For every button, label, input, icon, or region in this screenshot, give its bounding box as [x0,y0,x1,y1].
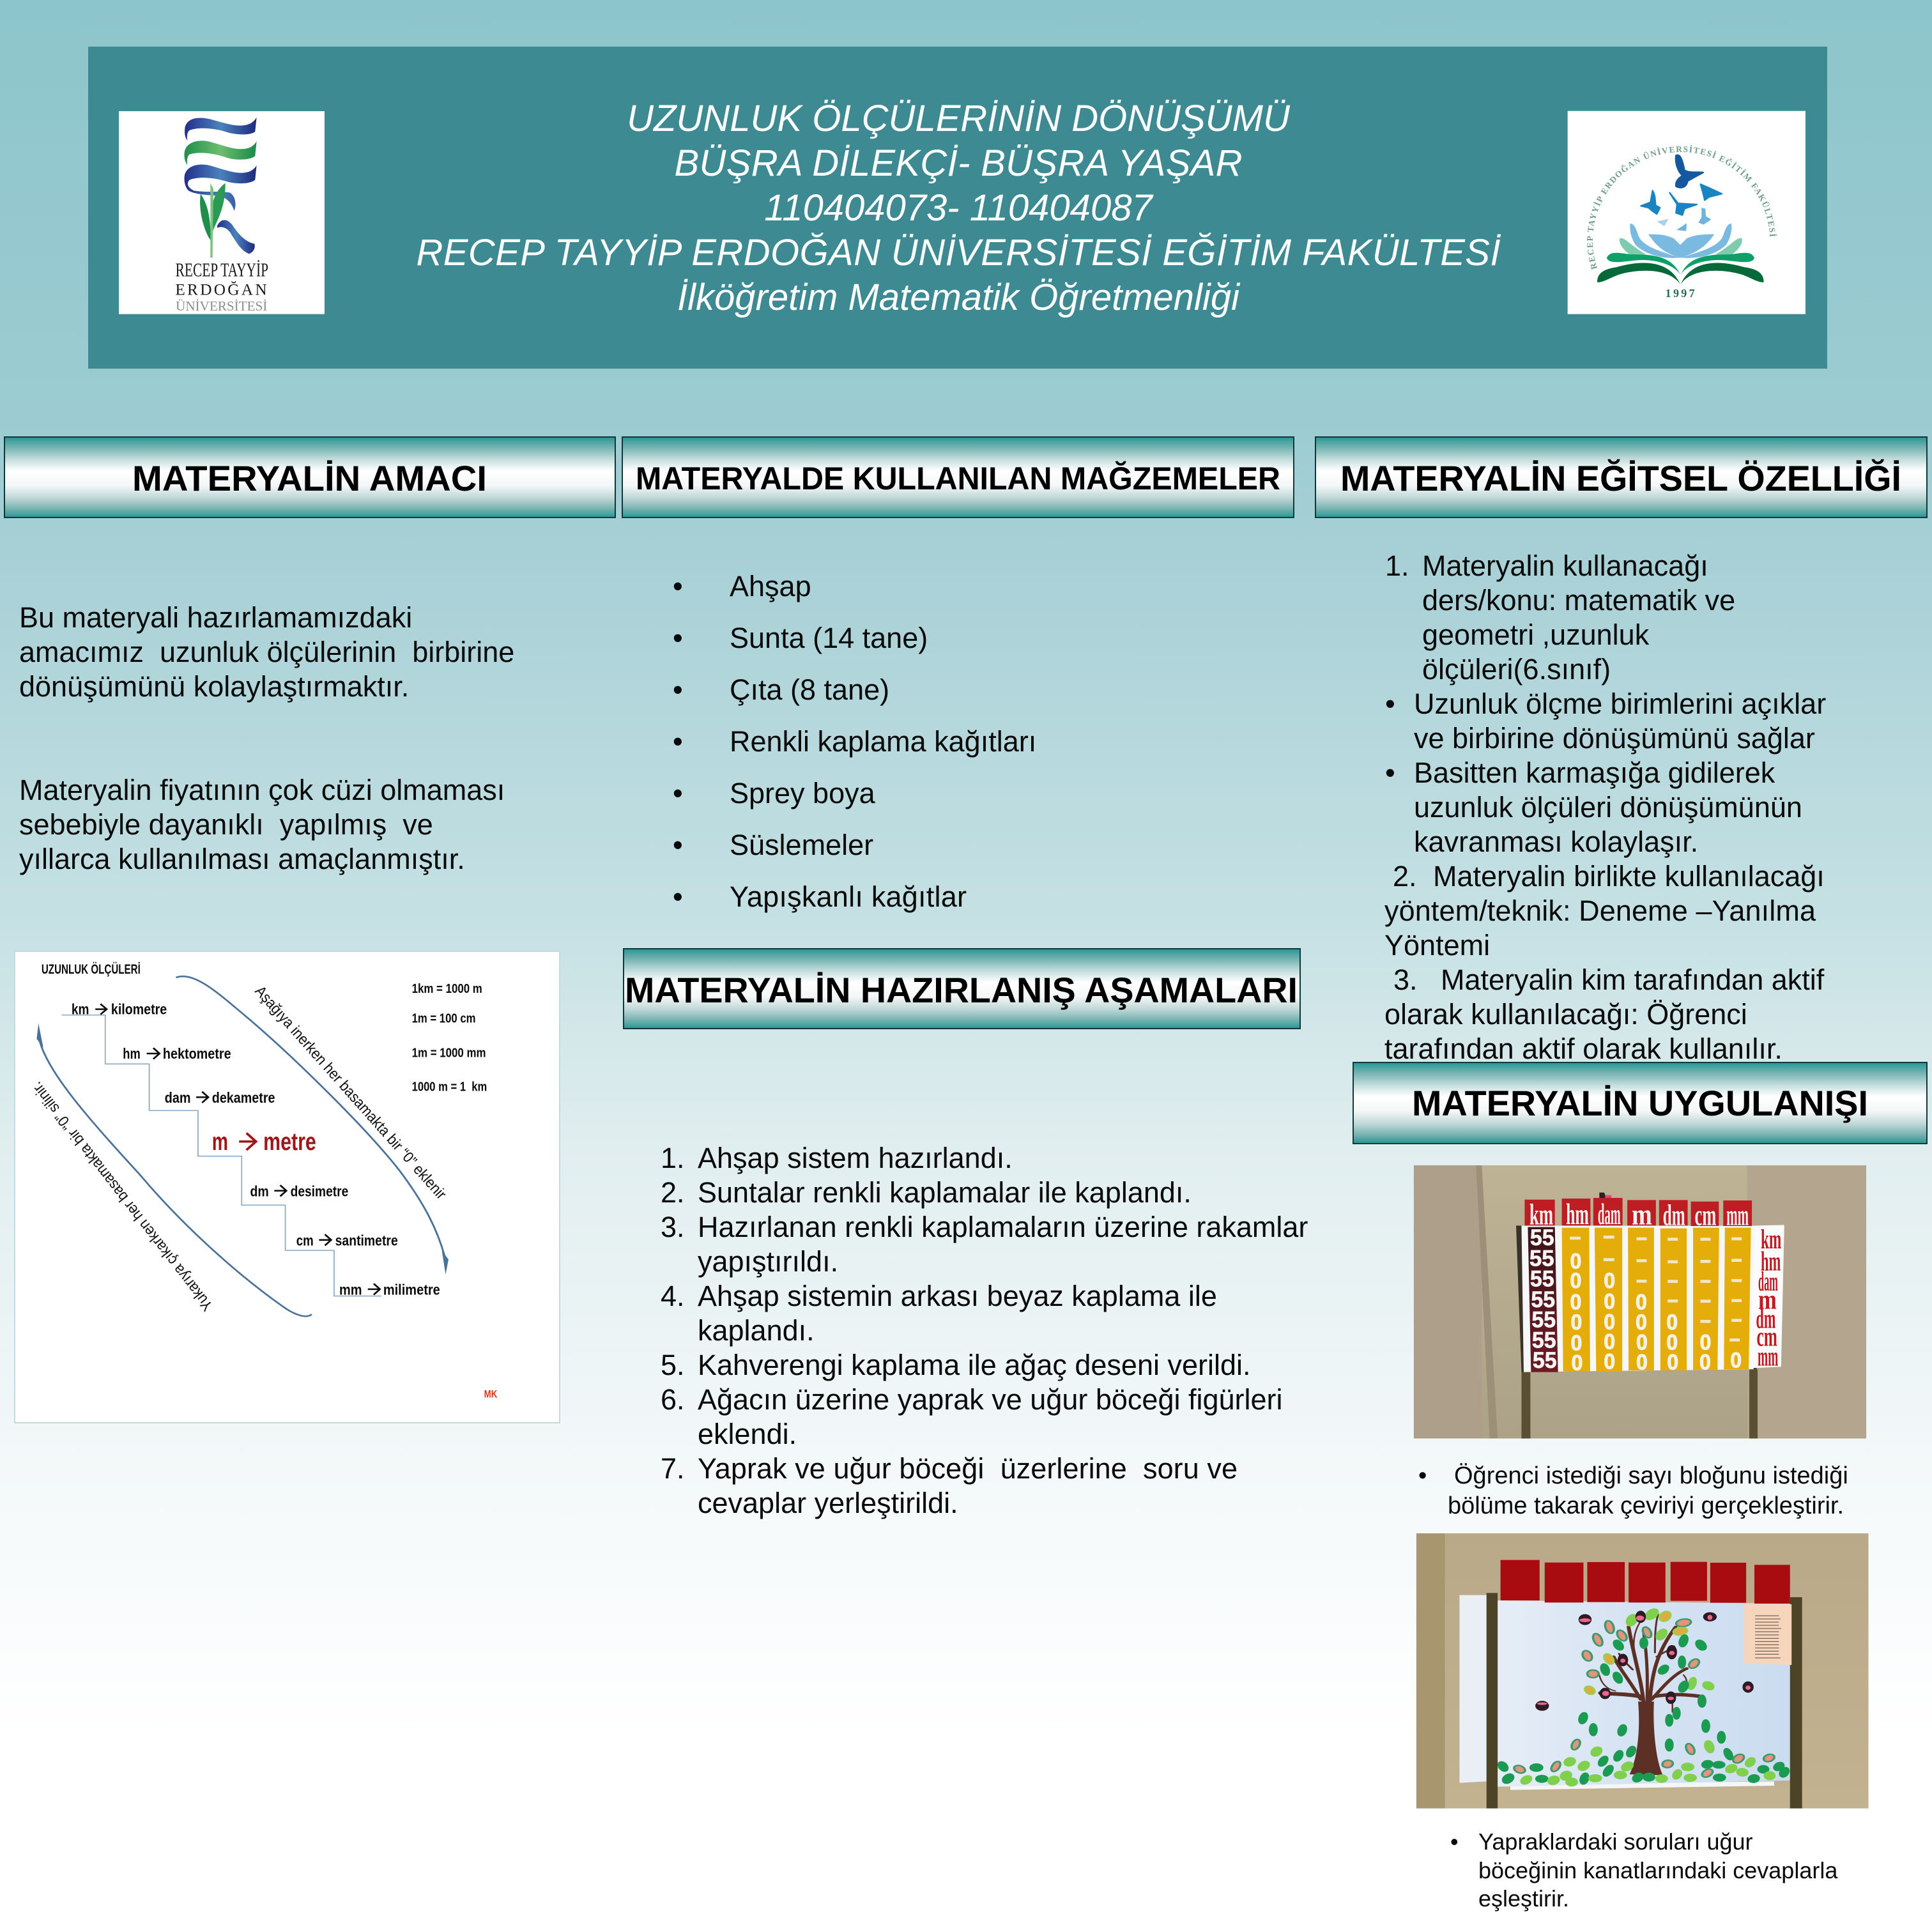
list: malzemeler: • [673,777,683,809]
photo: sayı blokları tahtası: 0 [1572,1351,1583,1375]
list: aşamalar: 2. [661,1176,685,1209]
list: aşamalar: 6. [661,1383,685,1416]
photo: sayı blokları tahtası: 55 [1531,1307,1556,1333]
list: aşamalar: 5. [661,1349,685,1381]
photo: sayı blokları tahtası [1414,1165,1866,1439]
photo: sayı blokları tahtası: dm [1663,1199,1685,1232]
diagram: uzunluk ölçüleri merdiveni: 1m = 100 cm [412,1011,475,1025]
heading: uygulanış: MATERYALİN UYGULANIŞI [1412,1083,1868,1123]
photo: sayı blokları tahtası: 0 [1604,1330,1615,1354]
photo: sayı blokları tahtası: 0 [1699,1330,1711,1354]
diagram: uzunluk ölçüleri merdiveni: 1000 m = 1 km [412,1079,487,1094]
photo: sayı blokları tahtası: 0 [1636,1351,1648,1375]
text block: eğitsel özellikler: 1. [1385,549,1409,582]
diagram: uzunluk ölçüleri merdiveni: cm [296,1233,314,1249]
panel: materyalin uygulanışı [1353,1062,1927,1912]
photo: sayı blokları tahtası: cm [1757,1321,1777,1352]
list: aşamalar: cevaplar yerleştirildi. [698,1487,958,1519]
diagram: uzunluk ölçüleri merdiveni: 1km = 1000 m [412,981,482,996]
text block: eğitsel özellikler [1384,549,1826,1065]
photo: sayı blokları tahtası: 0 [1636,1290,1647,1314]
text block: eğitsel özellikler: ölçüleri(6.sınıf) [1422,653,1611,686]
photo: sayı blokları tahtası: dm [1756,1303,1775,1334]
caption: yapraklar ve uğur böceği: • [1450,1828,1459,1855]
photo: sayı blokları tahtası: hm [1566,1197,1589,1230]
diagram: uzunluk ölçüleri merdiveni: Yukarıya çıkarken her basamakta bir “0” silinir. [28,1078,217,1314]
title text [417,98,1501,318]
panel: materyalde kullanılan malzemeler [622,437,1294,913]
text block: amaç paragrafları: sebebiyle dayanıklı yapılmış ve [19,808,433,841]
photo: sayı blokları tahtası: hm [1761,1246,1781,1276]
photo: sayı blokları tahtası: mm [1758,1341,1778,1372]
panel: hazırlanış aşamaları [624,949,1308,1519]
logo: Eğitim Fakültesi: 1997 [1666,287,1697,300]
caption: yapraklar ve uğur böceği [1450,1828,1838,1912]
photo: sayı blokları tahtası: 0 [1604,1289,1615,1314]
caption: öğrenci sayı bloğu: Öğrenci istediği sayı bloğunu istediği [1454,1462,1848,1489]
photo: sayı blokları tahtası: 0 [1730,1349,1742,1373]
list: malzemeler: Sunta (14 tane) [730,622,928,654]
text block: eğitsel özellikler: kavranması kolaylaşır. [1414,825,1698,858]
photo: sayı blokları tahtası: 0 [1604,1350,1615,1374]
diagram: uzunluk ölçüleri merdiveni: kilometre [111,1002,167,1018]
text block: eğitsel özellikler: geometri ,uzunluk [1422,618,1650,651]
diagram: uzunluk ölçüleri merdiveni: hektometre [163,1046,231,1062]
diagram: uzunluk ölçüleri merdiveni: 1m = 1000 mm [412,1045,486,1060]
logo arc text: RECEP TAYYİP ERDOĞAN ÜNİVERSİTESİ EĞİTİM FAKÜLTESİ [1587,145,1777,270]
title text: RECEP TAYYİP ERDOĞAN ÜNİVERSİTESİ EĞİTİM FAKÜLTESİ [417,232,1501,273]
list: aşamalar: Hazırlanan renkli kaplamaların üzerine rakamlar [698,1211,1308,1243]
photo: sayı blokları tahtası: 55 [1530,1225,1554,1250]
list: aşamalar: yapıştırıldı. [698,1245,838,1278]
photo: sayı blokları tahtası: 0 [1636,1330,1648,1354]
logo: Recep Tayyip Erdoğan Üniversitesi: ÜNİVERSİTESİ [176,298,267,314]
photo: sayı blokları tahtası: 0 [1571,1331,1582,1355]
heading: materyalin amacı [4,437,615,518]
heading: eğitsel özellik [1315,437,1927,518]
photo: sayı blokları tahtası: 0 [1570,1290,1581,1314]
logo: Recep Tayyip Erdoğan Üniversitesi [119,111,325,314]
caption: yapraklar ve uğur böceği: Yapraklardaki soruları uğur [1478,1828,1753,1855]
photo: sayı blokları tahtası: 55 [1531,1287,1555,1312]
text block: amaç paragrafları: Materyalin fiyatının çok cüzi olmaması [19,774,505,806]
text block: eğitsel özellikler: • [1385,756,1395,789]
photo: sayı blokları tahtası: 0 [1666,1310,1678,1335]
text block: eğitsel özellikler: Materyalin birlikte kullanılacağı [1433,860,1825,893]
list: aşamalar: 1. [661,1142,685,1174]
text block: eğitsel özellikler: ders/konu: matematik ve [1422,584,1735,617]
caption: öğrenci sayı bloğu: bölüme takarak çeviriyi gerçekleştirir. [1448,1492,1844,1519]
diagram: uzunluk ölçüleri merdiveni: santimetre [335,1233,398,1249]
text block: eğitsel özellikler: Materyalin kim tarafından aktif [1441,963,1825,996]
photo: sayı blokları tahtası: km [1761,1223,1781,1254]
text block: eğitsel özellikler: uzunluk ölçüleri dönüşümünün [1414,791,1802,824]
text block: eğitsel özellikler: yöntem/teknik: Deneme –Yanılma [1384,894,1816,927]
photo: sayı blokları tahtası: 55 [1533,1347,1557,1373]
diagram: uzunluk ölçüleri merdiveni: dam [165,1090,190,1107]
text block: eğitsel özellikler: Yöntemi [1384,929,1490,962]
text block: amaç paragrafları: yıllarca kullanılması amaçlanmıştır. [19,843,465,875]
caption: yapraklar ve uğur böceği: eşleştirir. [1478,1885,1569,1912]
photo: sayı blokları tahtası: 0 [1571,1310,1582,1335]
caption: yapraklar ve uğur böceği: böceğinin kanatlarındaki cevaplarla [1478,1857,1838,1883]
text block: eğitsel özellikler: Uzunluk ölçme birimlerini açıklar [1414,687,1826,720]
photo: sayı blokları tahtası: 0 [1570,1249,1581,1273]
photo: sayı blokları tahtası: 55 [1529,1245,1554,1271]
diagram: uzunluk ölçüleri merdiveni: hm [123,1046,141,1062]
list: aşamalar: 4. [661,1280,685,1312]
title text: UZUNLUK ÖLÇÜLERİNİN DÖNÜŞÜMÜ [627,98,1291,139]
list: malzemeler: • [673,673,683,706]
text block: eğitsel özellikler: tarafından aktif olarak kullanılır. [1384,1032,1782,1065]
list: malzemeler [673,570,1036,913]
list: aşamalar [661,1142,1308,1519]
list: malzemeler: • [673,725,683,758]
title text: İlköğretim Matematik Öğretmenliği [677,277,1241,318]
list: malzemeler: • [673,880,683,913]
list: malzemeler: Süslemeler [730,829,873,861]
text block: eğitsel özellikler: 2. [1393,860,1417,893]
list: malzemeler: Renkli kaplama kağıtları [730,725,1036,758]
list: malzemeler: • [673,570,683,602]
list: malzemeler: Ahşap [730,570,811,602]
diagram: uzunluk ölçüleri merdiveni: dm [250,1184,269,1200]
list: aşamalar: Kahverengi kaplama ile ağaç deseni verildi. [698,1349,1251,1381]
photo: sayı blokları tahtası: 0 [1604,1269,1615,1293]
caption: öğrenci sayı bloğu: • [1418,1462,1427,1489]
photo: sayı blokları tahtası: dam [1598,1197,1621,1230]
text block: amaç paragrafları [19,601,514,875]
photo: sayı blokları tahtası: mm [1726,1199,1749,1232]
heading: malzemeler [622,437,1294,518]
text block: amaç paragrafları: Bu materyali hazırlamamızdaki [19,601,412,634]
photo: sayı blokları tahtası: 0 [1604,1310,1615,1334]
list: aşamalar: Ahşap sistemin arkası beyaz kaplama ile [698,1280,1217,1312]
heading: materyalin amacı: MATERYALİN AMACI [132,458,487,498]
list: aşamalar: 3. [661,1211,685,1243]
diagram: uzunluk ölçüleri merdiveni: Aşağıya inerken her basamakta bir “0” eklenir [252,983,450,1203]
heading: hazırlanış aşamaları [624,949,1300,1029]
heading: eğitsel özellik: MATERYALİN EĞİTSEL ÖZELLİĞİ [1340,458,1901,498]
photo: sayı blokları tahtası: m [1758,1284,1777,1315]
logo: Recep Tayyip Erdoğan Üniversitesi: ERDOĞAN [175,281,267,299]
photo: sayı blokları tahtası: km [1529,1198,1553,1231]
photo: sayı blokları tahtası: 0 [1699,1350,1711,1374]
text block: eğitsel özellikler: Materyalin kullanacağı [1422,549,1708,582]
diagram: uzunluk ölçüleri merdiveni: desimetre [291,1184,348,1200]
diagram: uzunluk ölçüleri merdiveni: milimetre [383,1282,440,1298]
photo: sayı blokları tahtası: 0 [1666,1330,1678,1354]
photo: sayı blokları tahtası: cm [1695,1199,1716,1232]
text block: eğitsel özellikler: olarak kullanılacağı: Öğrenci [1384,998,1747,1031]
photo: sayı blokları tahtası: 0 [1667,1350,1678,1374]
photo: ağaç ve uğur böcekleri tahtası [1416,1533,1869,1809]
photo: sayı blokları tahtası: 55 [1530,1266,1554,1291]
list: aşamalar: Yaprak ve uğur böceği üzerlerine soru ve [698,1452,1238,1485]
list: malzemeler: Çıta (8 tane) [730,673,889,706]
list: aşamalar: Ağacın üzerine yaprak ve uğur böceği figürleri [698,1383,1283,1416]
diagram: uzunluk ölçüleri merdiveni: UZUNLUK ÖLÇÜLERİ [42,961,141,977]
photo: sayı blokları tahtası: 0 [1570,1269,1581,1293]
panel: eğitsel özellik [1315,437,1927,1065]
photo: sayı blokları tahtası: m [1632,1198,1652,1231]
heading: uygulanış [1353,1062,1927,1144]
text block: amaç paragrafları: dönüşümünü kolaylaştırmaktır. [19,670,409,703]
text block: eğitsel özellikler: ve birbirine dönüşümünü sağlar [1414,722,1815,755]
diagram: uzunluk ölçüleri merdiveni: dekametre [212,1090,275,1107]
text block: eğitsel özellikler: • [1385,687,1395,720]
diagram: uzunluk ölçüleri merdiveni: metre [263,1128,316,1155]
list: malzemeler: • [673,622,683,654]
diagram: uzunluk ölçüleri merdiveni: m [212,1128,228,1155]
heading: malzemeler: MATERYALDE KULLANILAN MAĞZEMELER [636,461,1280,496]
diagram: uzunluk ölçüleri merdiveni: MK [484,1388,498,1400]
list: malzemeler: • [673,829,683,861]
caption: öğrenci sayı bloğu [1418,1462,1848,1519]
title text: BÜŞRA DİLEKÇİ- BÜŞRA YAŞAR [675,142,1242,184]
photo: sayı blokları tahtası: 0 [1636,1310,1647,1335]
diagram: uzunluk ölçüleri merdiveni: mm [339,1282,362,1298]
title banner [88,47,1827,369]
diagram: uzunluk ölçüleri merdiveni: km [72,1002,89,1018]
list: aşamalar: Suntalar renkli kaplamalar ile kaplandı. [698,1176,1192,1209]
list: malzemeler: Yapışkanlı kağıtlar [730,880,967,913]
photo: sayı blokları tahtası: dam [1758,1266,1778,1296]
text block: amaç paragrafları: amacımız uzunluk ölçülerinin birbirine [19,636,514,668]
text block: eğitsel özellikler: 3. [1393,963,1418,996]
panel: materyalin amacı [4,437,615,1423]
diagram: uzunluk ölçüleri merdiveni [15,951,560,1423]
text block: eğitsel özellikler: Basitten karmaşığa gidilerek [1414,756,1775,789]
photo: sayı blokları tahtası: 55 [1532,1327,1556,1353]
logo: Eğitim Fakültesi [1568,111,1805,314]
title text: 110404073- 110404087 [764,187,1154,229]
list: malzemeler: Sprey boya [730,777,876,809]
fallen leaves and tree leaves [1497,1607,1790,1786]
list: aşamalar: Ahşap sistem hazırlandı. [698,1142,1013,1174]
heading: hazırlanış aşamaları: MATERYALİN HAZIRLANIŞ AŞAMALARI [625,970,1298,1010]
list: aşamalar: kaplandı. [698,1314,815,1347]
list: aşamalar: 7. [661,1452,685,1485]
logo: Recep Tayyip Erdoğan Üniversitesi: RECEP TAYYİP [176,259,268,281]
list: aşamalar: eklendi. [698,1418,797,1450]
